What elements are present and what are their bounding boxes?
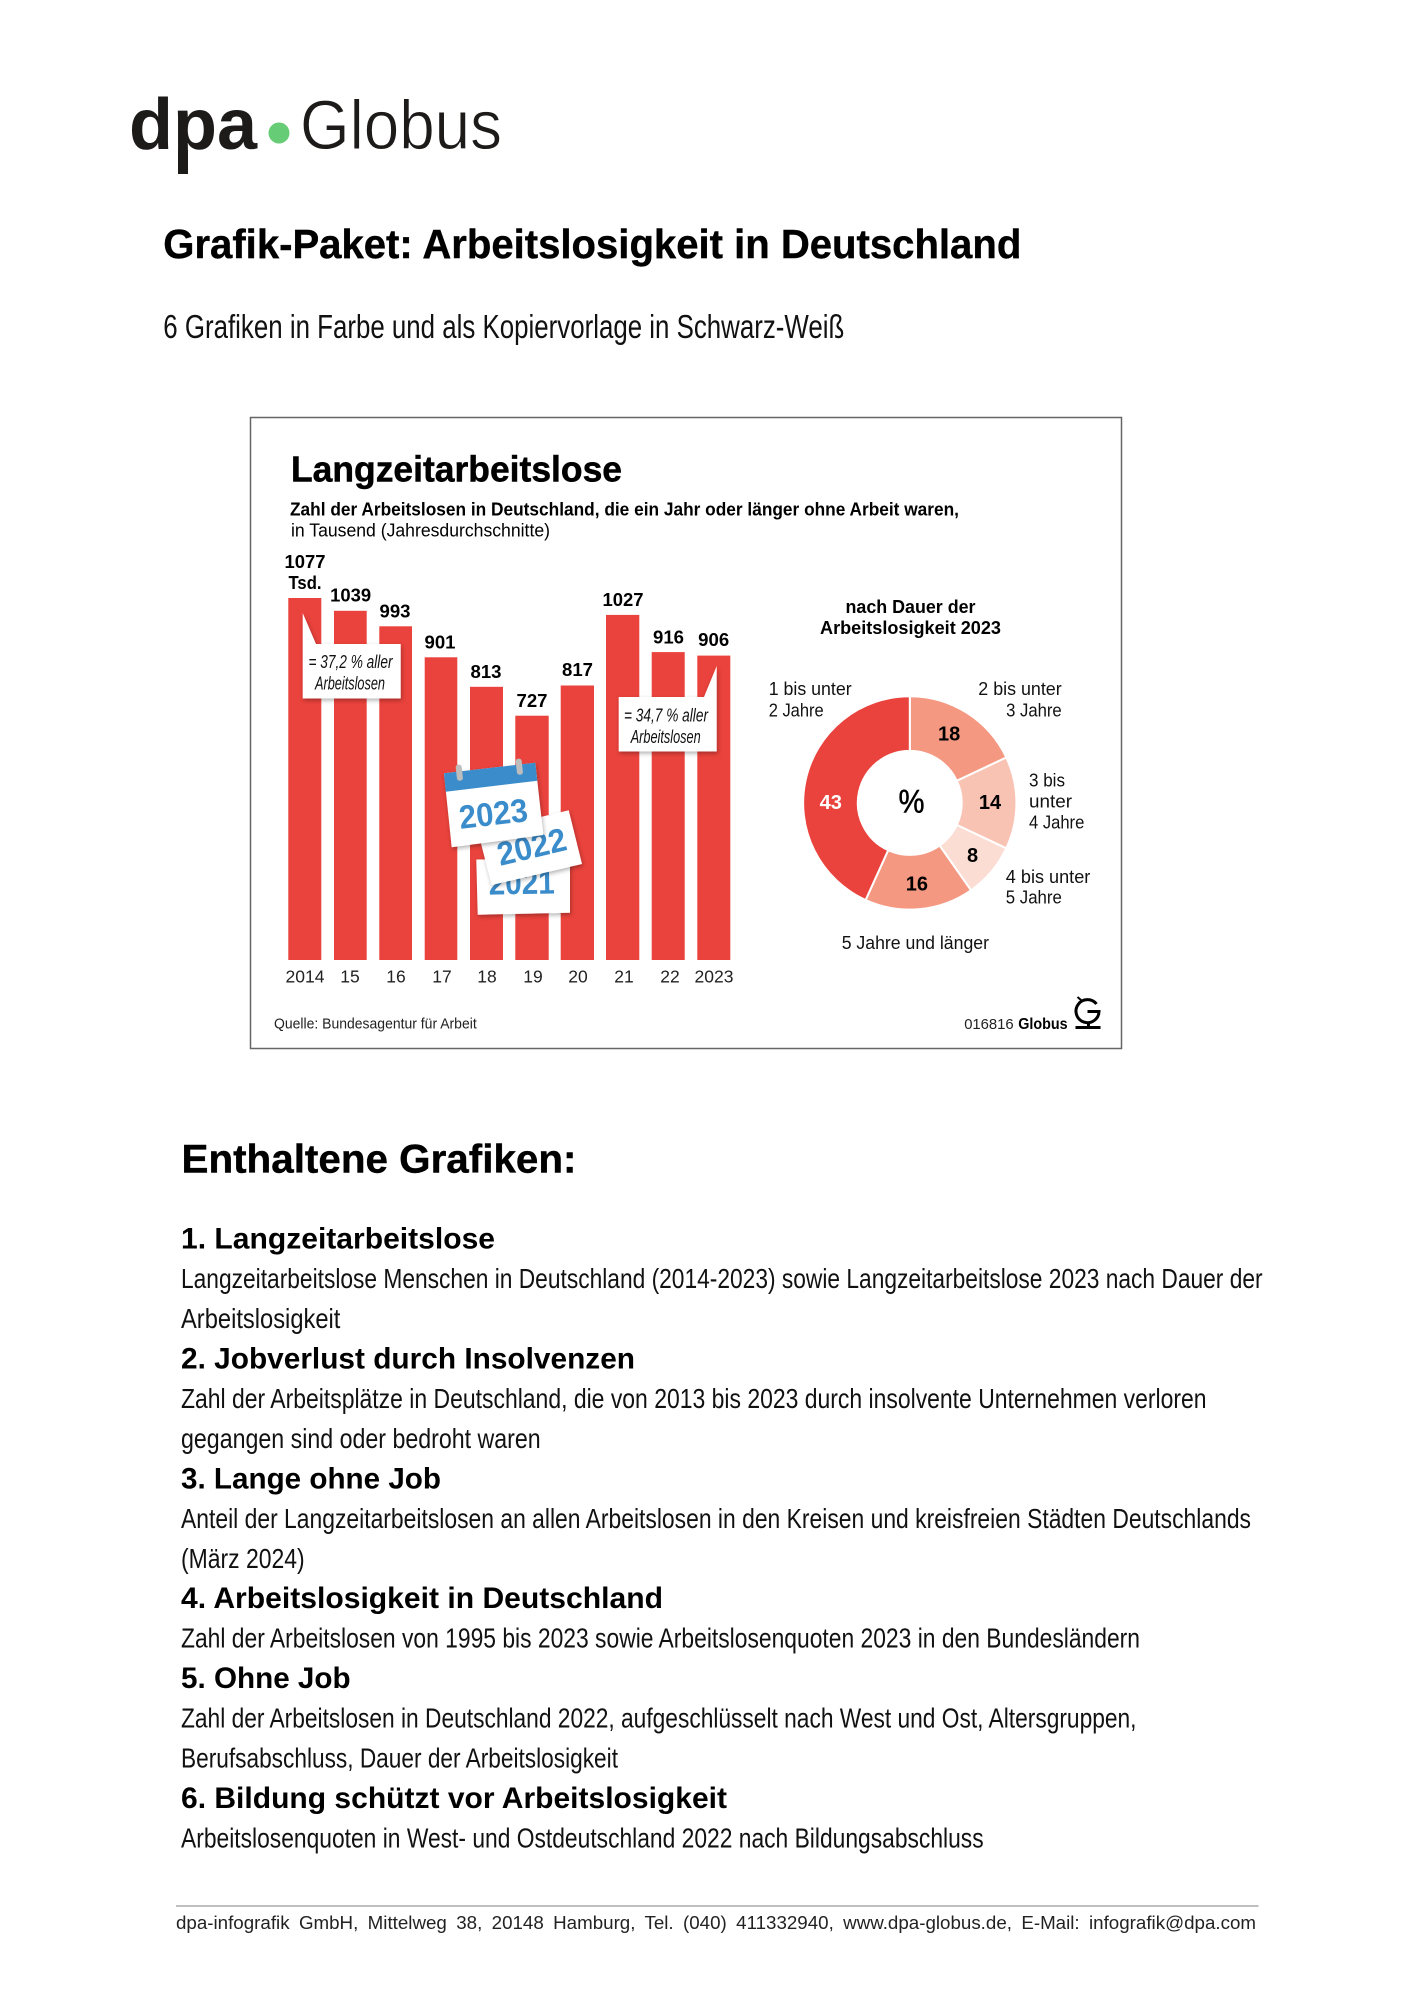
subtitle: 6 Grafiken in Farbe und als Kopiervorlage in Schwarz-Weiß [163,308,844,345]
callout: 37,2 %: = 37,2 % aller [308,651,393,672]
bar chart: long-term unemployed 2014-2023: 16 [386,966,406,986]
bar chart: long-term unemployed 2014-2023: 901 [424,632,456,652]
icon: Globus logo [1076,997,1100,1028]
text block: graphic 4 [181,1582,1140,1654]
logo: dpa Globus: dpa [129,85,258,165]
text block: graphic 5: Zahl der Arbeitslosen in Deutschland 2022, aufgeschlüsselt nach West und Ost, Altersgruppen, [181,1702,1136,1734]
bar chart: long-term unemployed 2014-2023: 19 [523,966,543,986]
text block: graphic 2: gegangen sind oder bedroht waren [181,1423,541,1454]
text block: graphic 4: Zahl der Arbeitslosen von 1995 bis 2023 sowie Arbeitslosenquoten 2023 in den Bundesländern [181,1622,1140,1654]
credit: Globus number: Globus [1018,1016,1068,1033]
donut labels: unter [1029,792,1072,812]
callout: 34,7 %: Arbeitslosen [630,726,701,747]
title: Grafik-Paket: Arbeitslosigkeit in Deutschland [163,221,1021,267]
donut labels: 2 bis unter [978,679,1062,699]
icon: calendar pages 2021 2022 2023: 2021 [488,863,555,902]
bar chart: long-term unemployed 2014-2023: 22 [660,966,680,986]
text block: graphic 6: 6. Bildung schützt vor Arbeitslosigkeit [181,1782,727,1815]
chart subheading: Zahl der Arbeitslosen in Deutschland, die ein Jahr oder länger ohne Arbeit waren, [290,500,959,520]
callout: 37,2 %: Arbeitslosen [314,672,385,694]
donut chart: duration of unemployment: % [898,784,924,820]
bar chart: long-term unemployed 2014-2023: 1039 [330,586,371,606]
text block: graphic 3: 3. Lange ohne Job [181,1462,441,1496]
donut labels: 5 Jahre [1006,888,1062,908]
credit: Globus number: 016816 [964,1016,1014,1033]
text block: graphic 5: Berufsabschluss, Dauer der Arbeitslosigkeit [181,1742,618,1774]
donut chart: duration of unemployment: 14 [979,792,1002,814]
donut heading: nach Dauer der [846,597,976,617]
donut labels: 4 bis unter [1006,867,1090,887]
text block: graphic 1 [181,1222,1263,1334]
text block: graphic 5: 5. Ohne Job [181,1662,351,1695]
text block: graphic 3 [181,1462,1251,1574]
bar chart: long-term unemployed 2014-2023: 18 [477,966,497,986]
donut labels: 5 Jahre und länger [842,933,989,953]
text block: graphic 1: 1. Langzeitarbeitslose [181,1222,495,1256]
callout: 34,7 %: = 34,7 % aller [624,704,709,726]
text block: graphic 6 [181,1782,984,1854]
donut heading [820,597,1001,638]
section heading: Enthaltene Grafiken: [182,1138,576,1182]
bar chart: long-term unemployed 2014-2023: 21 [614,966,634,986]
footer contact line: dpa-infografik GmbH, Mittelweg 38, 20148 Hamburg, Tel. (040) 411332940, www.dpa-globus.de, E-Mail: infografik@dpa.com [176,1913,1256,1933]
bar chart: long-term unemployed 2014-2023: 2014 [286,966,325,986]
callout: 34,7 % [619,666,717,752]
bar chart: long-term unemployed 2014-2023: 993 [380,602,410,622]
credit: Globus number [964,1016,1068,1033]
bar chart: long-term unemployed 2014-2023 [284,552,734,986]
donut labels: 3 bis [1029,770,1065,790]
donut chart: duration of unemployment: 18 [938,723,960,745]
chart heading: Langzeitarbeitslose [291,448,622,490]
bar chart: long-term unemployed 2014-2023: 813 [470,662,502,682]
donut labels: 4 Jahre [1029,812,1084,832]
donut chart: duration of unemployment: 16 [906,874,928,896]
donut chart: duration of unemployment: 43 [820,792,842,814]
bar chart: long-term unemployed 2014-2023: 2023 [694,966,734,986]
bar chart: long-term unemployed 2014-2023: 20 [568,966,588,986]
donut chart: duration of unemployment [803,696,1016,910]
text block: graphic 4: 4. Arbeitslosigkeit in Deutschland [181,1582,663,1615]
donut heading: Arbeitslosigkeit 2023 [820,618,1001,638]
bar chart: long-term unemployed 2014-2023: 1077 [284,552,326,572]
bar chart: long-term unemployed 2014-2023: 17 [432,966,452,986]
bar chart: long-term unemployed 2014-2023: Tsd. [288,573,322,593]
donut labels: 1 bis unter [769,679,852,699]
donut labels: 2 Jahre [769,700,824,720]
bar chart: long-term unemployed 2014-2023: 906 [698,630,729,650]
chart subheading: in Tausend (Jahresdurchschnitte) [291,520,550,540]
text block: graphic 2: Zahl der Arbeitsplätze in Deutschland, die von 2013 bis 2023 durch insolvente Unternehmen verloren [181,1383,1206,1414]
bar chart: long-term unemployed 2014-2023: 727 [516,691,548,711]
callout: 37,2 % [303,613,401,698]
icon: calendar pages 2021 2022 2023: 2023 [457,791,530,836]
bar chart: long-term unemployed 2014-2023: 916 [653,628,684,648]
logo: dpa Globus [129,85,502,174]
text block: graphic 2: 2. Jobverlust durch Insolvenzen [181,1342,635,1376]
icon: calendar pages 2021 2022 2023 [444,758,582,915]
text block: graphic 3: (März 2024) [181,1543,305,1574]
bar chart: long-term unemployed 2014-2023: 817 [562,660,593,680]
bar chart: long-term unemployed 2014-2023: 1027 [602,590,644,610]
text block: graphic 2 [181,1342,1206,1454]
text block: graphic 1: Arbeitslosigkeit [181,1303,341,1334]
panel: Langzeitarbeitslose chart [250,418,1122,1048]
chart subheading [290,500,959,540]
text block: graphic 5 [181,1662,1136,1774]
icon: calendar pages 2021 2022 2023: 2022 [493,820,570,873]
donut chart: duration of unemployment: 8 [967,845,978,867]
source line: Quelle: Bundesagentur für Arbeit [274,1016,477,1032]
donut labels: 3 Jahre [1006,700,1062,720]
logo: dpa Globus: Globus [300,86,502,164]
donut labels [769,679,1090,953]
text block: graphic 6: Arbeitslosenquoten in West- und Ostdeutschland 2022 nach Bildungsabschluss [181,1822,984,1854]
bar chart: long-term unemployed 2014-2023: 15 [340,966,360,986]
